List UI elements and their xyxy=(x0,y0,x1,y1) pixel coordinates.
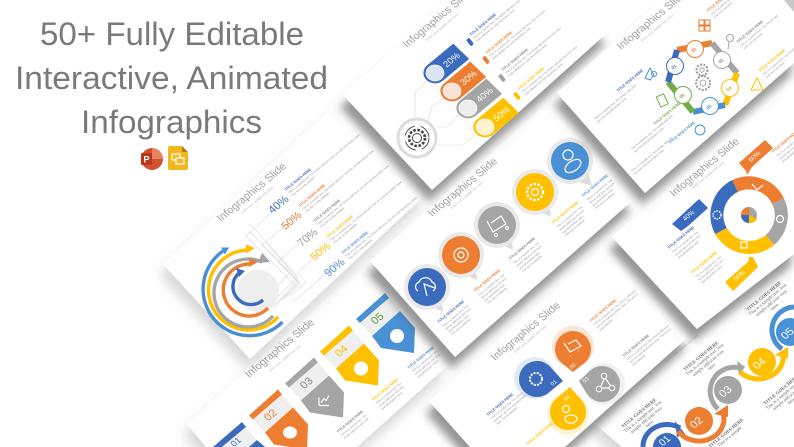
tab text blocks: This is a sample text. You xyxy=(374,381,403,405)
teardrop 03 grey xyxy=(579,363,625,405)
inner circle xyxy=(237,270,279,312)
pill 30% xyxy=(436,62,486,106)
title: 50+ Fully Editable xyxy=(40,16,304,52)
teardrop text blocks: here. Text is editable. xyxy=(495,405,519,426)
octagon text blocks: This is a sample text. You simply add your xyxy=(630,114,674,151)
octagon text blocks: This is a sample text. You simply add xyxy=(739,14,779,47)
pin text blocks: and description here. xyxy=(483,282,507,302)
slide subtitle: Enter your subtitle line here xyxy=(450,181,484,210)
node numbers xyxy=(670,46,733,110)
text rows: This is a sample text. You simply add your own text and description here. xyxy=(329,180,404,242)
pill 50%: 50% xyxy=(491,105,512,123)
teardrop 01 blue: 01 xyxy=(550,379,559,387)
pin text blocks: This is a sample text. You xyxy=(555,205,583,229)
teardrop text blocks: This is a sample text. You simply add your xyxy=(625,324,670,361)
octagon text blocks: TITLE GOES HERE xyxy=(616,68,645,93)
slide subtitle: Enter your subtitle line here xyxy=(268,344,302,373)
octagon text blocks: TITLE GOES HERE xyxy=(653,101,682,126)
tab text blocks: This is a sample text. You xyxy=(339,413,368,437)
teardrop text blocks: This is a sample text. You simply xyxy=(489,390,525,420)
pin text blocks: This text is editable. xyxy=(594,191,616,210)
pin text blocks: and description here. xyxy=(447,313,471,333)
pin text blocks: and description here. xyxy=(561,214,585,234)
tag 60% xyxy=(739,140,773,175)
pin text blocks: TITLE GOES HERE xyxy=(581,173,610,198)
node numbers: 04 xyxy=(725,85,733,92)
step text blocks: here. xyxy=(706,362,717,371)
concentric arrows xyxy=(203,244,282,336)
tab 04: 04 xyxy=(333,343,351,359)
donut text blocks xyxy=(667,129,794,284)
donut text blocks: simply add your own text xyxy=(697,258,724,282)
slide subtitle: Enter your subtitle line here xyxy=(691,161,725,190)
pin text blocks: simply add your own text xyxy=(515,244,542,268)
pill 30%: 30% xyxy=(458,69,479,87)
text rows xyxy=(284,129,421,261)
step text blocks: This is a sample text. You xyxy=(748,282,788,316)
octagon text blocks: your own text here. xyxy=(712,0,734,19)
text rows: This text is fully editable. xyxy=(319,206,346,229)
pill text rows: This is a sample text. You simply add your own text here. xyxy=(504,26,563,75)
tab text blocks: simply add your own text xyxy=(377,385,405,408)
node numbers: 02 xyxy=(690,46,698,53)
step text blocks: simply add your own xyxy=(629,405,663,434)
pin text blocks: TITLE GOES HERE xyxy=(473,268,502,293)
accent bars xyxy=(466,37,521,101)
pin text blocks: This text is editable. xyxy=(450,317,472,336)
pin text blocks: This text is editable. xyxy=(486,286,508,305)
gear badge xyxy=(398,119,436,157)
step 02 arrow and circle: 02 xyxy=(688,415,706,431)
node numbers: 03 xyxy=(717,57,725,64)
icon: Google Slides xyxy=(168,146,188,170)
pin text blocks: simply add your own text xyxy=(558,208,585,232)
node numbers: 05 xyxy=(705,103,713,110)
pill text rows xyxy=(469,0,582,97)
tab text blocks xyxy=(336,345,445,440)
percentage labels: 50% xyxy=(279,210,305,232)
pill text rows: TITLE GOES HERE xyxy=(469,12,498,37)
teardrop text blocks: TITLE GOES HERE xyxy=(589,298,618,323)
slide: donut chart, right xyxy=(612,79,794,329)
text rows: This text is fully editable. xyxy=(347,238,374,261)
tab text blocks: and description here. xyxy=(380,391,404,411)
pill text rows: Fully editable text and description here. xyxy=(507,43,549,78)
faint subtitle: Enter your subtitle line here xyxy=(665,334,699,363)
pill text rows: Fully editable text and description here. xyxy=(475,8,517,43)
teardrop 02 orange: 02 xyxy=(569,362,578,370)
teardrop text blocks xyxy=(486,286,675,446)
teardrop text blocks: own text and description here. This text is xyxy=(595,292,639,329)
central pie xyxy=(741,207,757,223)
pin text blocks: This is a sample text. You xyxy=(477,273,505,297)
pin text blocks: This text is editable. xyxy=(564,218,586,237)
pin text blocks: TITLE GOES HERE xyxy=(551,200,580,225)
tab text blocks: TITLE GOES HERE xyxy=(371,377,400,402)
pin text blocks: This is a sample text. You xyxy=(441,304,469,328)
octagon text blocks: own text and description here. xyxy=(633,126,665,153)
slide corner, top right xyxy=(784,0,794,12)
slide: concentric arrows and percentages, left xyxy=(163,103,425,359)
connector lines xyxy=(246,212,328,308)
step text blocks: here. xyxy=(644,419,655,428)
tab 04 xyxy=(320,326,379,386)
octagon text blocks: This is a sample text. You simply add your xyxy=(630,136,674,173)
text rows: This text is fully editable. xyxy=(332,222,359,245)
tag 50%: 50% xyxy=(732,269,748,283)
slide subtitle: Enter your subtitle line here xyxy=(240,186,274,215)
tab 02: 02 xyxy=(262,407,280,423)
tag 50% xyxy=(725,257,758,291)
donut icons xyxy=(713,184,784,248)
pin text blocks: This is a sample text. You xyxy=(585,178,613,202)
percentage labels: 70% xyxy=(295,227,321,249)
teardrop 02 orange xyxy=(552,326,594,372)
donut text blocks: This is a sample text. You xyxy=(671,230,699,254)
text rows: TITLE GOES HERE xyxy=(341,230,370,255)
slide: location pins row, centre xyxy=(370,102,633,357)
central gears xyxy=(696,64,710,90)
octagon text blocks: TITLE GOES HERE xyxy=(758,48,787,73)
tag 60%: 60% xyxy=(747,150,763,164)
tab text blocks: TITLE GOES HERE xyxy=(336,409,365,434)
pin text blocks: simply add your own text xyxy=(480,276,507,300)
percentage labels: 90% xyxy=(322,257,348,279)
text rows: TITLE GOES HERE xyxy=(313,198,342,223)
text rows: This text is fully editable. xyxy=(304,191,331,214)
numbered nodes xyxy=(666,40,738,114)
step 01 arrow and circle xyxy=(643,421,685,447)
step 04 arrow and circle: 04 xyxy=(751,356,769,372)
slide: octagon cycle, top right xyxy=(557,0,794,193)
pin text blocks: simply add your own text xyxy=(444,307,471,331)
step text blocks: here. xyxy=(769,302,780,311)
slide subtitle: Enter your subtitle line here xyxy=(640,14,674,43)
tab 03 xyxy=(285,358,344,418)
step 03 arrow and circle: 03 xyxy=(717,384,735,400)
tab text blocks: simply add your own text xyxy=(413,353,441,376)
pill 40%: 40% xyxy=(474,86,495,104)
pill text rows: This is a sample text. You simply add your own text here. xyxy=(488,9,547,58)
slide: tabbed shields, bottom left xyxy=(187,266,447,447)
node numbers: 06 xyxy=(678,92,686,99)
octagon text blocks: TITLE GOES HERE xyxy=(668,120,697,145)
step text blocks: This is a sample text. You xyxy=(685,342,725,376)
title: Interactive, Animated xyxy=(15,60,328,96)
pill 50% xyxy=(469,98,519,142)
tab 02 xyxy=(249,390,308,447)
tab text blocks: TITLE GOES HERE xyxy=(407,345,436,370)
step 03 arrow and circle xyxy=(710,361,745,409)
pin text blocks: and description here. xyxy=(518,250,542,270)
teardrop text blocks: own text and description here. This text is xyxy=(628,327,672,364)
pin 3 grey xyxy=(474,202,520,250)
pill text rows: TITLE GOES HERE xyxy=(501,47,530,72)
tab text blocks: simply add your own text xyxy=(342,417,370,440)
title xyxy=(15,16,328,140)
text rows: This is a sample text. You simply add your own text and description here. xyxy=(287,133,362,195)
donut text blocks: and description here. xyxy=(700,264,724,284)
slide heading: Infographics Slide xyxy=(489,300,563,363)
octagon ring xyxy=(668,43,737,112)
pill 40% xyxy=(452,79,502,123)
teardrop 04 yellow xyxy=(547,387,589,435)
teardrop 01 blue xyxy=(514,357,563,399)
tag 40% xyxy=(672,199,708,231)
octagon text blocks: own text and description here. xyxy=(633,148,665,175)
pin text blocks: This text is editable. xyxy=(521,254,543,273)
pin text blocks: TITLE GOES HERE xyxy=(437,299,466,324)
text rows: TITLE GOES HERE xyxy=(284,167,313,192)
slide heading: Infographics Slide xyxy=(243,317,317,380)
percentage labels: 40% xyxy=(266,194,292,216)
teardrop text blocks: TITLE GOES HERE xyxy=(622,333,651,358)
step text blocks: This is a sample text. You xyxy=(623,399,663,433)
pin 5 blue xyxy=(547,138,593,186)
pill 20% xyxy=(419,44,469,88)
pin text blocks: simply add your own text xyxy=(588,181,615,205)
step text blocks: TITLE GOES HERE xyxy=(683,341,720,372)
donut text blocks: TITLE GOES HERE xyxy=(690,250,719,275)
pin 2 orange xyxy=(438,232,484,280)
connector lines xyxy=(415,80,475,145)
pill text rows: Fully editable text and description here. xyxy=(491,26,533,61)
teardrop text blocks: TITLE GOES HERE xyxy=(526,421,555,446)
percentage labels: 50% xyxy=(308,241,334,263)
slide subtitle: Enter your subtitle line here xyxy=(425,13,459,42)
donut text blocks: TITLE GOES HERE xyxy=(667,225,696,250)
step text blocks: TITLE GOES HERE xyxy=(621,398,658,429)
pin text blocks: and description here. xyxy=(591,187,615,207)
tag 40%: 40% xyxy=(681,209,697,223)
teardrop text blocks: TITLE GOES HERE xyxy=(486,392,515,417)
node numbers: 01 xyxy=(670,63,678,70)
step text blocks xyxy=(620,279,794,447)
teardrop text blocks: fully editable. xyxy=(598,318,614,332)
octagon text blocks: own text and description here. xyxy=(596,96,628,123)
text rows: TITLE GOES HERE xyxy=(326,214,355,239)
icon: PowerPoint xyxy=(141,148,163,170)
pill text rows: Fully editable text and description here. xyxy=(523,62,565,97)
octagon text blocks: your own text here. xyxy=(742,31,764,50)
tab 03: 03 xyxy=(298,375,316,391)
percentage labels xyxy=(266,194,348,279)
slide: teardrop quadrants, bottom centre xyxy=(429,244,688,447)
octagon text blocks: This is a sample text. You simply add your xyxy=(593,84,637,121)
donut text blocks: simply add your own text xyxy=(674,233,701,257)
slide: percentage pills, top centre xyxy=(343,0,608,190)
tab 05 xyxy=(356,293,415,353)
octagon text blocks: TITLE GOES HERE xyxy=(736,19,765,44)
octagon text blocks: your own text here. xyxy=(764,60,786,79)
tab 01 xyxy=(213,422,265,447)
satellite icons xyxy=(645,20,763,135)
step text blocks: simply add your own xyxy=(754,288,788,317)
tab text blocks: This is a sample text. You xyxy=(410,349,439,373)
teardrop text blocks: fully editable. xyxy=(631,353,647,367)
slide heading: Infographics Slide xyxy=(668,136,742,199)
donut chart xyxy=(717,183,781,247)
slide heading: Infographics Slide xyxy=(426,156,500,219)
pin 1 blue xyxy=(404,264,450,312)
teardrop 03 grey: 03 xyxy=(582,376,591,384)
step 04 arrow and circle xyxy=(740,347,788,379)
tab 05: 05 xyxy=(369,311,387,327)
pin text blocks: TITLE GOES HERE xyxy=(508,236,537,261)
teardrop text blocks: This is a sample text. You simply add your xyxy=(592,289,637,326)
pill text rows: This is a sample text. You simply add your own text here. xyxy=(520,45,579,94)
step 05 arrow and circle xyxy=(772,307,794,349)
pin 4 yellow xyxy=(512,169,558,217)
pill text rows: TITLE GOES HERE xyxy=(517,66,546,91)
donut text blocks: and description here. xyxy=(677,239,701,259)
pill text rows: TITLE GOES HERE xyxy=(485,30,514,55)
text rows: This text is fully editable. xyxy=(290,175,317,198)
step text blocks: simply add your own xyxy=(691,348,725,377)
step text blocks: TITLE GOES HERE xyxy=(746,281,783,312)
slide subtitle: Enter your subtitle line here xyxy=(513,325,547,354)
step 02 arrow and circle xyxy=(678,405,728,441)
teardrop text blocks: add your own text and description xyxy=(492,392,529,423)
pill 20%: 20% xyxy=(441,51,462,69)
text rows: This is a sample text. You simply add your own text and description here. xyxy=(316,164,391,226)
step text blocks: This is a sample xyxy=(716,425,743,447)
title: Infographics xyxy=(81,104,262,140)
slide heading: Infographics Slide xyxy=(215,161,289,224)
text rows: TITLE GOES HERE xyxy=(298,183,327,208)
pin text blocks: This is a sample text. You xyxy=(512,241,540,265)
text rows: This is a sample text. You simply add your own text and description here. xyxy=(344,196,419,258)
octagon text blocks xyxy=(593,0,794,175)
pin text blocks xyxy=(437,173,623,336)
tab text blocks: and description here. xyxy=(416,359,440,379)
teardrop 04 yellow: 04 xyxy=(563,394,572,402)
icon: PowerPoint: P xyxy=(143,154,150,164)
donut text blocks: This is a sample text. You xyxy=(694,255,722,279)
slide: numbered arrow steps, bottom right xyxy=(595,267,794,447)
text rows: This is a sample text. You simply add your own text and description here. xyxy=(301,149,376,211)
